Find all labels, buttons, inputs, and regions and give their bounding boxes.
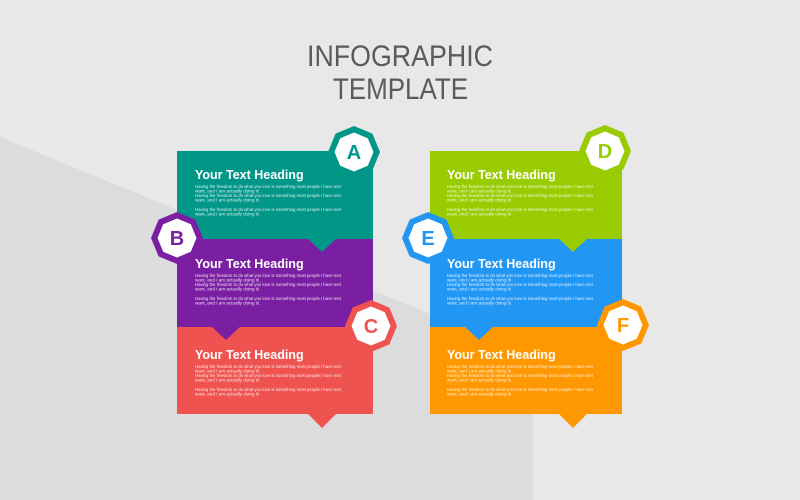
title xyxy=(307,40,493,106)
icon: badge A: A xyxy=(347,142,361,164)
icon: badge D xyxy=(579,125,631,177)
panel: D xyxy=(430,151,622,252)
panel: B: Your Text Heading xyxy=(195,257,304,271)
icon: badge D: D xyxy=(598,141,612,163)
icon: badge E: E xyxy=(421,228,435,250)
icon: badge B: B xyxy=(170,228,184,250)
panel: C: Your Text Heading xyxy=(195,348,304,362)
icon: badge B xyxy=(151,212,203,264)
panel: E: Your Text Heading xyxy=(447,257,556,271)
panel: A: Your Text Heading xyxy=(195,168,304,182)
panel: D: Your Text Heading xyxy=(447,168,556,182)
panel: E xyxy=(430,239,622,340)
title: TEMPLATE xyxy=(333,73,468,106)
icon: badge E xyxy=(402,212,454,264)
icon: badge A xyxy=(328,126,380,178)
icon: badge F xyxy=(597,299,649,351)
panel: F xyxy=(430,327,622,428)
panel: A xyxy=(177,151,373,252)
title: INFOGRAPHIC xyxy=(307,40,493,73)
panel: B xyxy=(177,239,373,340)
icon: badge C xyxy=(345,300,397,352)
panel: C xyxy=(177,327,373,428)
icon: badge F: F xyxy=(617,315,629,337)
panel: F: Your Text Heading xyxy=(447,348,556,362)
icon: badge C: C xyxy=(364,316,378,338)
